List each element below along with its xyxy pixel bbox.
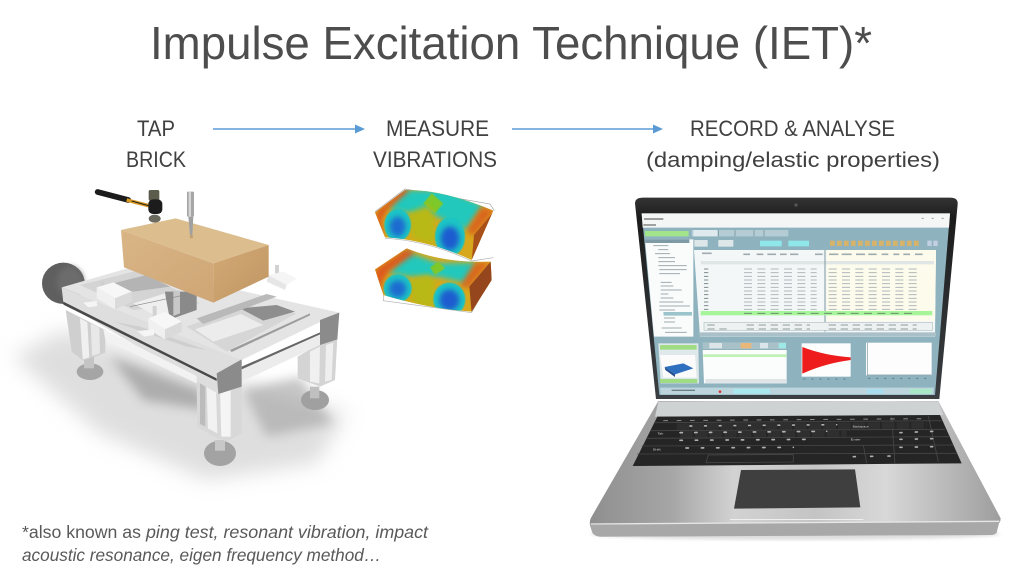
step label: measure vibrations — [373, 116, 497, 172]
step label: record and analyse — [646, 116, 940, 172]
status bar — [660, 388, 934, 394]
software window — [642, 213, 950, 395]
hammer — [98, 190, 162, 223]
floor shadow — [13, 330, 347, 480]
tree panel — [645, 239, 693, 337]
laptop screen — [635, 198, 958, 399]
table frame — [62, 267, 339, 394]
lower left sample panel — [658, 343, 699, 383]
decay chart — [802, 343, 851, 377]
keyboard: Enter — [851, 438, 861, 442]
clamps and wires — [83, 265, 297, 339]
clamp: right — [267, 265, 297, 290]
brick — [121, 218, 269, 303]
laptop — [590, 198, 1001, 540]
mode shape: bent downward — [375, 248, 492, 313]
vibration sensor — [187, 192, 194, 238]
title: Impulse Excitation Technique (IET)* — [150, 17, 872, 69]
keyboard: Shift — [653, 448, 661, 452]
step label: record and analyse: (damping/elastic properties) — [646, 149, 940, 172]
step label: record and analyse: RECORD & ANALYSE — [690, 116, 895, 141]
tabs — [692, 230, 788, 236]
frequency chart — [866, 343, 932, 375]
laptop base and keyboard — [590, 401, 1001, 537]
clamp: rear — [83, 282, 132, 309]
test rig illustration — [13, 190, 347, 480]
table legs and feet — [66, 310, 337, 466]
title bar — [642, 213, 950, 228]
highlighted row — [701, 311, 932, 315]
step label: measure vibrations: VIBRATIONS — [373, 147, 497, 172]
weight wheel — [42, 263, 85, 304]
keyboard — [633, 415, 962, 466]
touchpad — [734, 469, 860, 509]
footnote: acoustic resonance, eigen frequency method… — [22, 545, 381, 565]
clamp: front — [137, 306, 182, 339]
mode shape: bent upward — [374, 188, 494, 262]
footnote: ping test, resonant vibration, impact — [145, 522, 429, 542]
back legs — [163, 287, 198, 317]
keyboard: Tab — [657, 432, 664, 436]
footnote: *also known as — [22, 522, 141, 542]
footnote — [22, 522, 429, 565]
step label: measure vibrations: MEASURE — [386, 116, 489, 141]
keyboard: Backspace — [853, 424, 869, 428]
data table — [694, 250, 936, 337]
lower results table — [703, 342, 786, 349]
summary rows — [704, 322, 932, 330]
step label: tap brick: BRICK — [126, 147, 186, 172]
toolbar — [694, 240, 708, 247]
bezel — [635, 198, 958, 399]
arrow: tap to measure — [213, 124, 365, 134]
step label: tap brick: TAP — [137, 116, 175, 141]
webcam — [794, 203, 798, 207]
arrow: measure to record — [512, 124, 663, 134]
base body — [590, 401, 1001, 537]
vibration mode shapes — [374, 188, 494, 313]
laptop shadow — [590, 528, 1000, 540]
step label: tap brick — [126, 116, 186, 172]
